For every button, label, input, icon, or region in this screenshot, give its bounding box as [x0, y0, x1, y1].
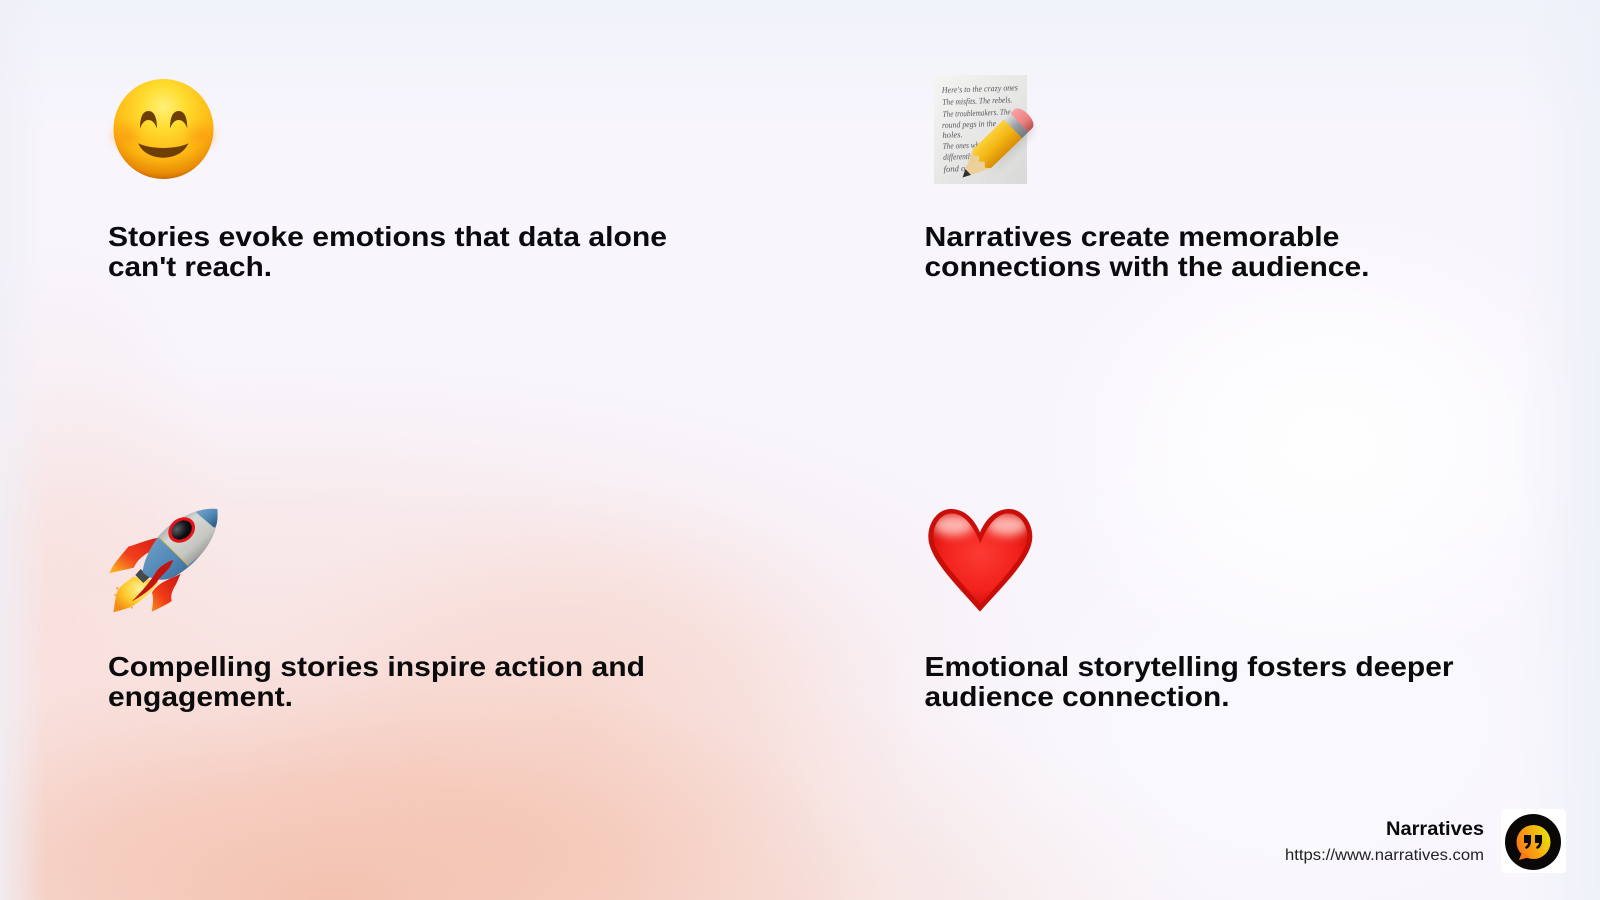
text: action: engagement.	[108, 681, 293, 712]
text: memorable: Narratives create memorable	[924, 221, 1340, 252]
text: emotions: Stories evoke emotions that data alone	[108, 221, 667, 252]
icon: memo and pencil: The misfits. The rebels.	[942, 94, 1012, 107]
icon: memo and pencil	[934, 75, 1039, 189]
icon: rocket	[109, 508, 218, 612]
brand footer	[1285, 809, 1566, 873]
icon: memo and pencil: differently	[943, 151, 973, 162]
panel: memorable	[924, 75, 1370, 282]
brand name: Narratives	[1386, 819, 1484, 840]
panel: action	[108, 502, 645, 712]
text: connection: Emotional storytelling fosters deeper	[924, 651, 1454, 682]
text: memorable: connections with the audience.	[924, 251, 1370, 282]
icon: memo and pencil: fond of	[943, 163, 969, 174]
text: emotions	[108, 221, 667, 282]
icon: memo and pencil: round pegs in the	[942, 118, 996, 130]
text: action: Compelling stories inspire action and	[108, 651, 645, 682]
icon: memo and pencil: Here's to the crazy ones	[941, 82, 1019, 95]
panel: connection	[924, 509, 1454, 712]
text: connection: audience connection.	[924, 681, 1230, 712]
icon: brand logo	[1501, 809, 1566, 873]
text: connection	[924, 651, 1454, 712]
icon: memo and pencil: The ones who	[943, 140, 984, 151]
panel: emotions	[108, 79, 667, 282]
text: action	[108, 651, 645, 712]
icon: memo and pencil: holes.	[942, 129, 963, 140]
text: memorable	[924, 221, 1370, 282]
icon: smiling face	[114, 79, 214, 179]
icon: memo and pencil: The troublemakers. The	[942, 107, 1011, 119]
icon: red heart	[928, 509, 1032, 612]
brand url: https://www.narratives.com	[1285, 847, 1484, 864]
text: emotions: can't reach.	[108, 251, 272, 282]
